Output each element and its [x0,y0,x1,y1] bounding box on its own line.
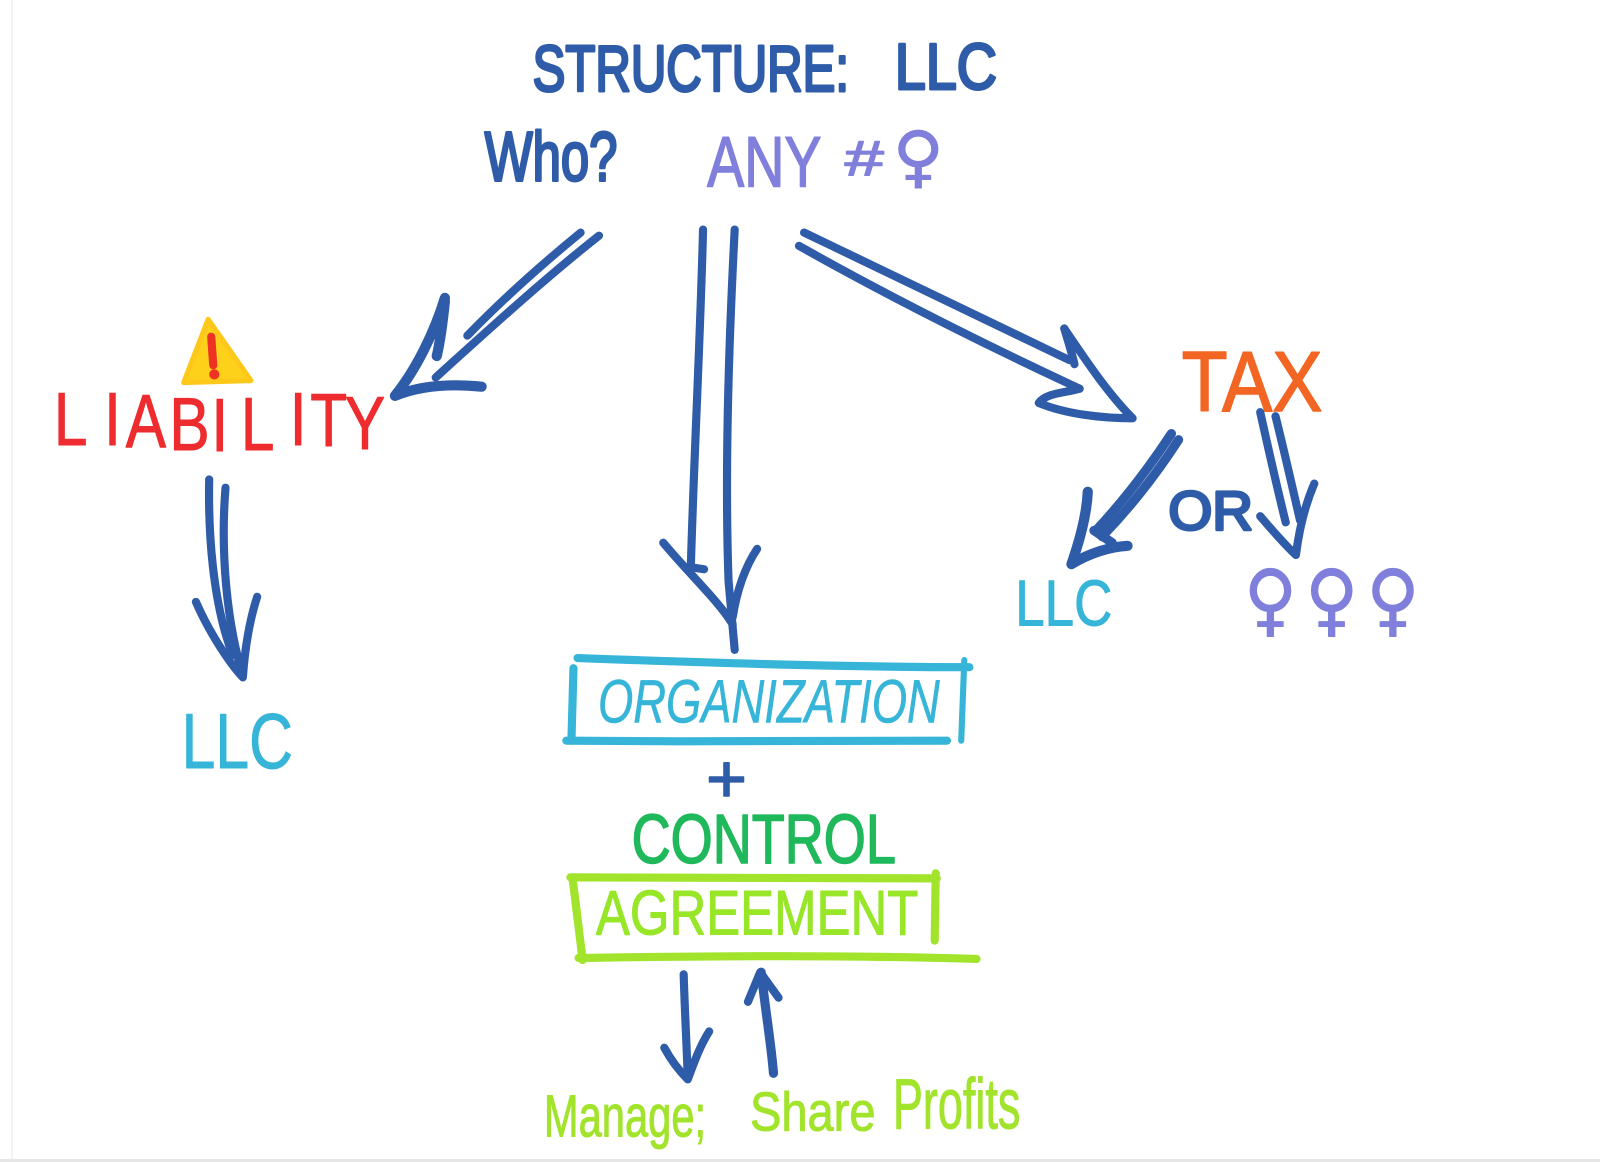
member symbols [1244,552,1419,645]
member symbols: ♀ [1366,552,1419,645]
arrow: to organization [663,230,757,650]
title: STRUCTURE: [533,32,849,105]
member symbols: ♀ [1305,552,1358,645]
any number of members: ♀ [893,118,944,196]
control label: CONTROL [632,800,896,878]
arrow: tax to members [1260,412,1314,555]
arrow: up from profits [748,972,779,1073]
liability label: LIABILITY [54,377,385,467]
organization label: ORGANIZATION [598,667,940,735]
manage and share profits label: Profits [893,1064,1020,1144]
member symbols: ♀ [1244,552,1297,645]
plus sign: + [706,742,747,817]
any number of members: ANY [707,123,821,203]
arrow: tax to llc [1071,434,1179,564]
manage and share profits label [544,1064,1020,1149]
any number of members: # [845,132,884,186]
arrow: down to manage [664,974,709,1079]
llc label: tax: LLC [1015,566,1112,639]
box: organization [566,658,969,741]
manage and share profits label: Manage; [544,1083,706,1149]
title: LLC [895,30,997,103]
llc label: liability: LLC [182,699,293,785]
arrow: liability to llc [196,479,257,677]
arrow: to liability [395,233,599,396]
any number of members [707,118,944,203]
arrow: to tax [799,233,1133,418]
box: agreement [570,873,977,960]
agreement label: AGREEMENT [596,879,918,948]
manage and share profits label: Share [750,1080,876,1142]
or label: OR [1168,479,1253,541]
warning icon [184,319,251,383]
tax label: TAX [1182,334,1322,430]
who label: Who? [485,118,617,196]
